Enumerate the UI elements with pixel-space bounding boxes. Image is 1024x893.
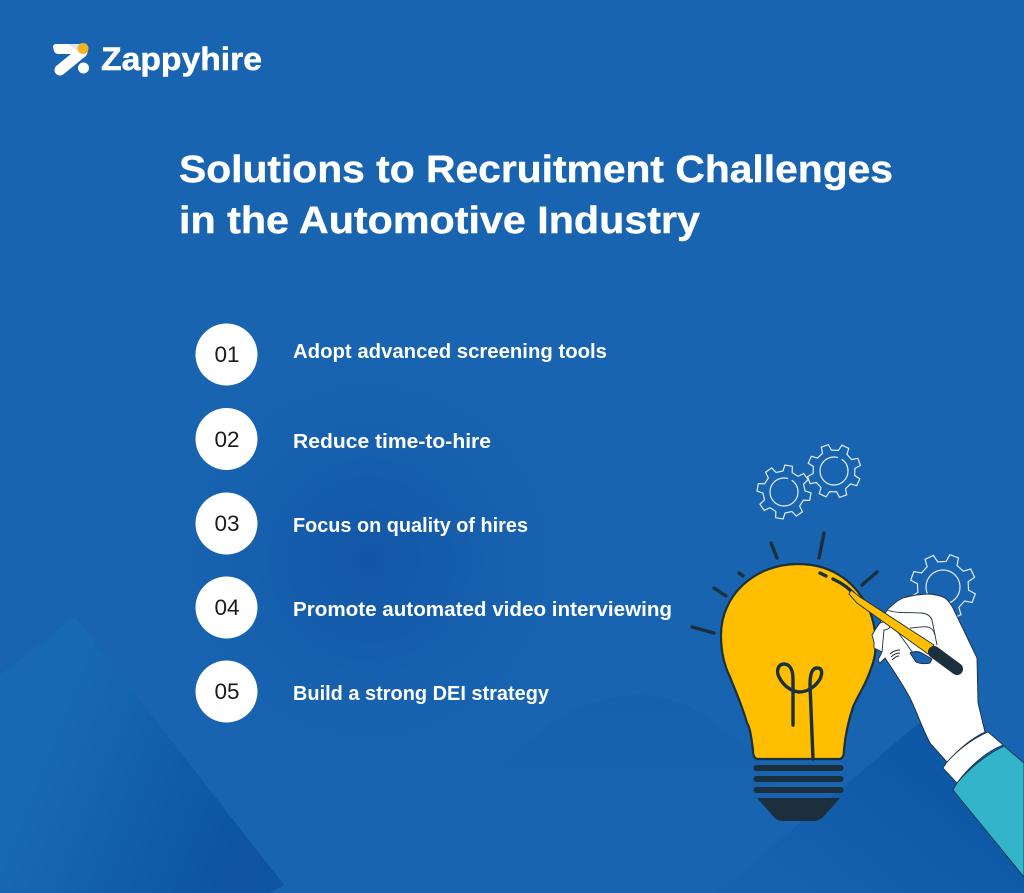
item 01: Adopt advanced screening tools — [293, 341, 607, 363]
logo wordmark: Zappyhire — [101, 41, 262, 77]
icon: hand finger details — [880, 610, 937, 660]
icon: light bulb — [721, 564, 876, 821]
item 03 — [196, 492, 528, 554]
item 04: Promote automated video interviewing — [293, 599, 672, 621]
item 01: 01 — [214, 342, 240, 367]
item 05 — [196, 660, 550, 722]
title: in the Automotive Industry — [179, 200, 700, 242]
item 02: 02 — [214, 427, 240, 452]
item 02: Reduce time-to-hire — [293, 431, 491, 453]
item 03: 03 — [214, 511, 240, 536]
item 04: 04 — [214, 595, 240, 620]
item 01 — [196, 324, 607, 386]
hand gap — [910, 652, 932, 664]
illustration: light bulb and hand — [692, 435, 1024, 877]
icon: gears — [753, 435, 985, 629]
logo: Zappyhire — [53, 41, 262, 77]
title: Solutions to Recruitment Challenges — [179, 149, 893, 191]
icon: pencil — [849, 590, 957, 669]
item 02 — [196, 408, 491, 470]
icon: cuff — [943, 732, 1003, 783]
list of solutions — [196, 324, 672, 722]
icon: hand — [872, 594, 985, 762]
item 03: Focus on quality of hires — [293, 515, 528, 537]
icon: logo mark — [53, 43, 89, 74]
icon: light rays — [692, 533, 877, 633]
item 04 — [196, 576, 672, 638]
item 05: 05 — [214, 679, 240, 704]
title — [179, 149, 893, 242]
icon: sleeve — [953, 746, 1024, 877]
item 05: Build a strong DEI strategy — [293, 683, 550, 705]
